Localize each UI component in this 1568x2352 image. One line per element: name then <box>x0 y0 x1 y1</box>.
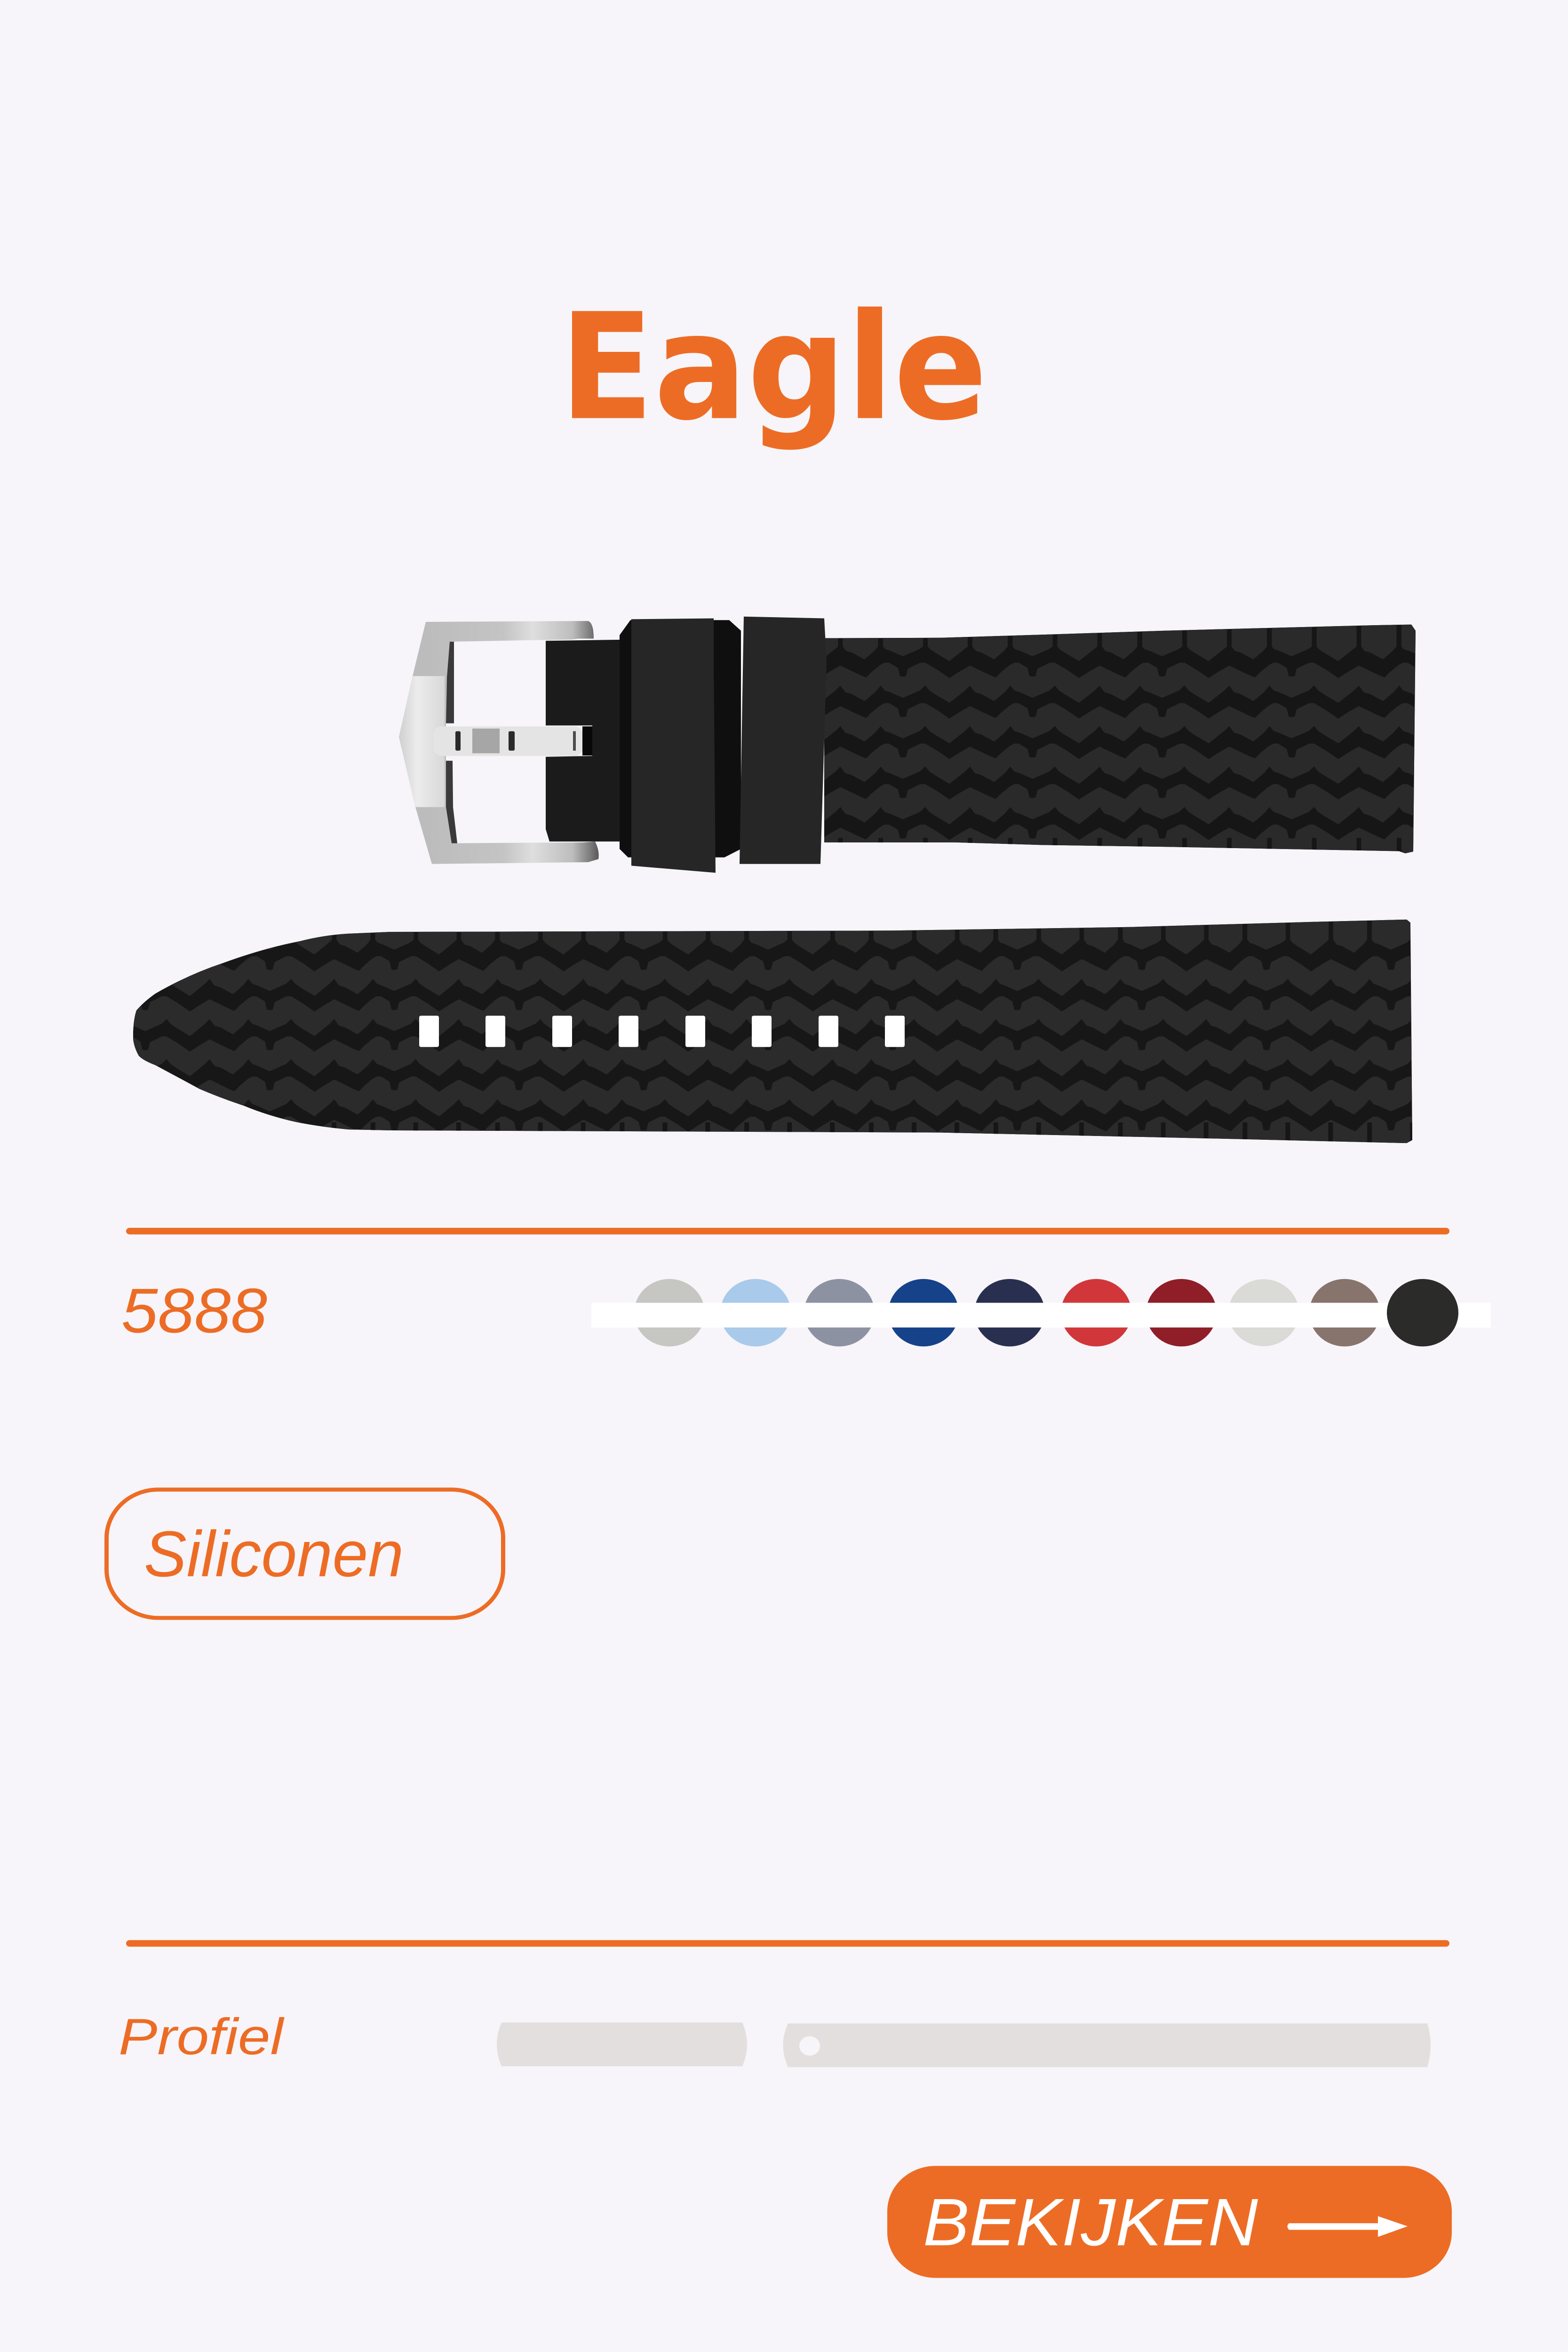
metal buckle <box>399 621 599 864</box>
button <box>887 2166 1452 2278</box>
lower strap with tread <box>127 913 1421 1151</box>
keeper loop backing <box>620 620 741 858</box>
material label: Siliconen <box>144 1518 404 1590</box>
buckle pin <box>433 726 592 756</box>
strap photo: long piece with holes <box>127 913 1421 1151</box>
divider bottom <box>126 1940 1449 1947</box>
title: Eagle: Eagle <box>559 282 987 453</box>
strap holes <box>419 1016 905 1047</box>
keeper loop 1 <box>631 618 716 873</box>
divider top <box>126 1228 1449 1234</box>
profile bar long <box>783 2024 1431 2067</box>
button label: BEKIJKEN <box>923 2185 1258 2260</box>
upper strap with tread <box>819 618 1421 861</box>
keeper loop 2 <box>740 617 827 864</box>
arrow <box>1287 2216 1408 2237</box>
strap photo: buckle piece <box>399 617 1421 873</box>
material pill <box>106 1490 503 1618</box>
profile label: Profiel <box>119 2008 285 2065</box>
colour swatches <box>591 1279 1491 1346</box>
profile bar short <box>497 2023 747 2066</box>
article number: 5888 <box>121 1276 267 1346</box>
strap stub <box>546 639 633 842</box>
